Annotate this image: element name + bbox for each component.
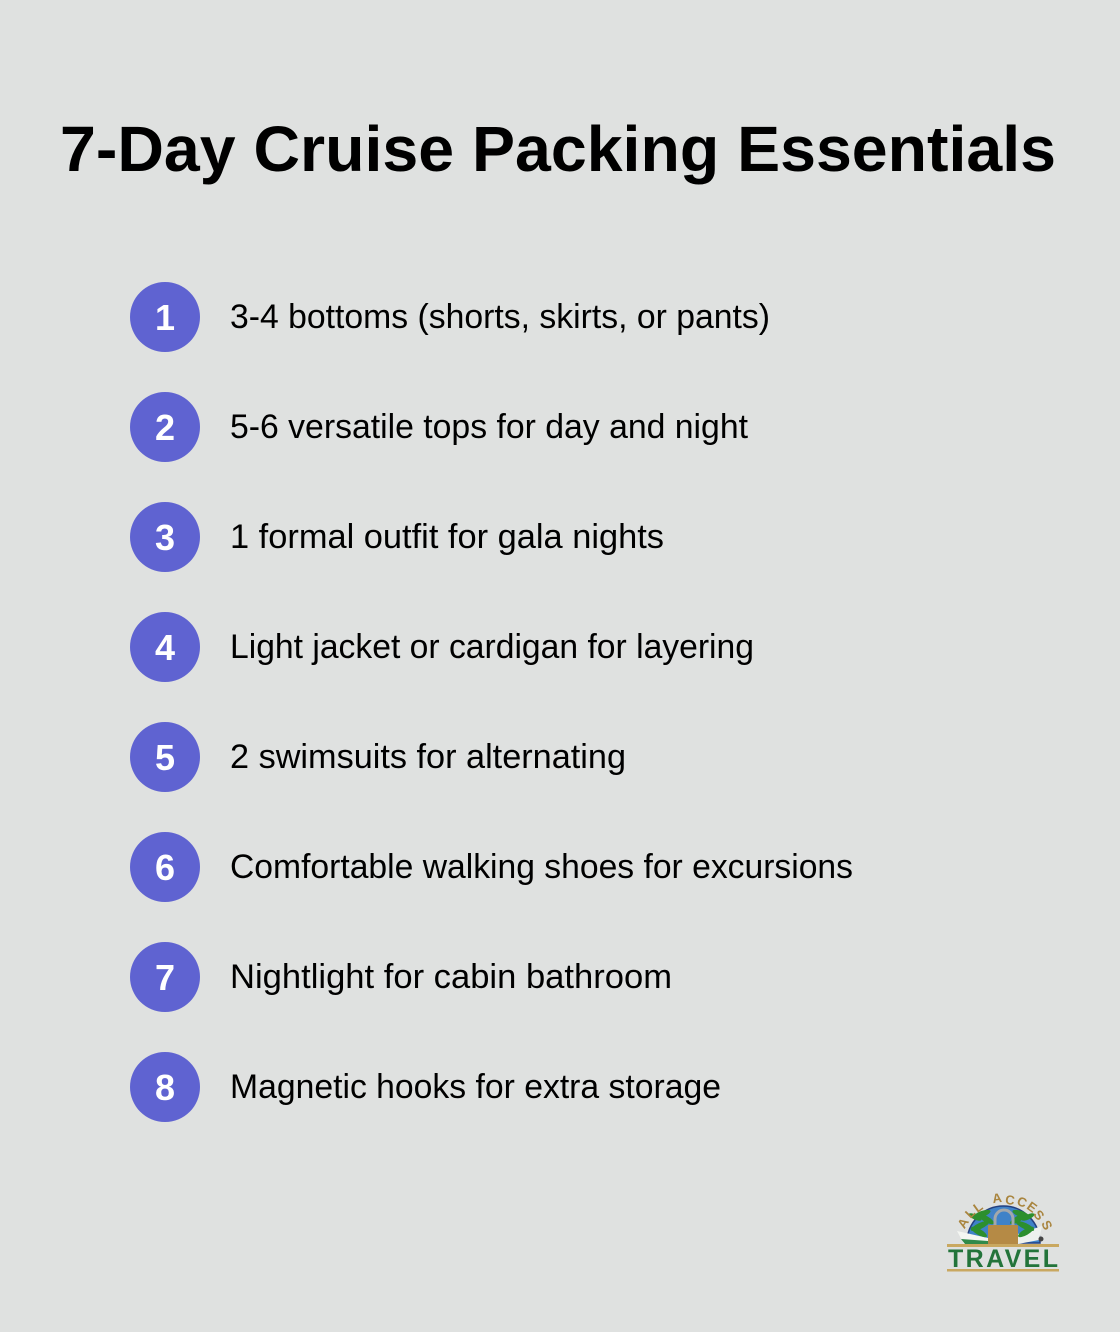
item 5: swimsuits: 2 swimsuits for alternating [230,738,626,776]
logo padlock [995,1210,1013,1226]
logo arc lettering: L [962,1205,978,1221]
item 1: bottoms: 1 [155,297,175,338]
logo arc lettering: A [991,1190,1003,1206]
item 2: tops [130,392,749,462]
item 4: jacket: Light jacket or cardigan for layering [230,628,754,666]
item 7: nightlight [130,942,672,1012]
logo arc lettering: A [954,1215,972,1231]
logo gold rules [947,1244,1059,1247]
item 5: swimsuits: 5 [155,737,175,778]
item 3: formal outfit: 3 [155,517,175,558]
logo arc lettering: C [1015,1193,1030,1211]
item 8: magnetic hooks: Magnetic hooks for extra storage [230,1068,721,1106]
logo arc lettering [954,1190,1056,1232]
item 3: formal outfit [130,502,664,572]
item 3: formal outfit: 1 formal outfit for gala nights [230,518,664,556]
item 1: bottoms: 3-4 bottoms (shorts, skirts, or pants) [230,298,770,336]
logo arc lettering: C [1004,1192,1016,1208]
item 2: tops: 2 [155,407,175,448]
item 5: swimsuits [130,722,626,792]
logo dome [967,1206,1040,1243]
logo wordmark: TRAVEL [948,1245,1058,1273]
item 8: magnetic hooks: 8 [155,1067,175,1108]
logo ships [957,1231,988,1244]
logo arc lettering: L [970,1199,986,1215]
item 6: walking shoes: 6 [155,847,175,888]
item 1: bottoms [130,282,770,352]
item 6: walking shoes [130,832,853,902]
item 2: tops: 5-6 versatile tops for day and night [230,408,749,446]
item 7: nightlight: 7 [155,957,175,998]
item 7: nightlight: Nightlight for cabin bathroom [230,958,672,996]
item 6: walking shoes: Comfortable walking shoes for excursions [230,848,853,886]
title: 7-Day Cruise Packing Essentials [60,113,1056,185]
item 8: magnetic hooks [130,1052,721,1122]
checklist [130,282,853,1122]
logo arc lettering: E [1024,1198,1040,1216]
logo arc lettering: S [1038,1218,1056,1232]
logo: All Access Travel [947,1190,1059,1273]
item 4: jacket [130,612,754,682]
item 4: jacket: 4 [155,627,175,668]
logo arc lettering: S [1030,1207,1048,1223]
logo palm trees [968,1208,1035,1239]
